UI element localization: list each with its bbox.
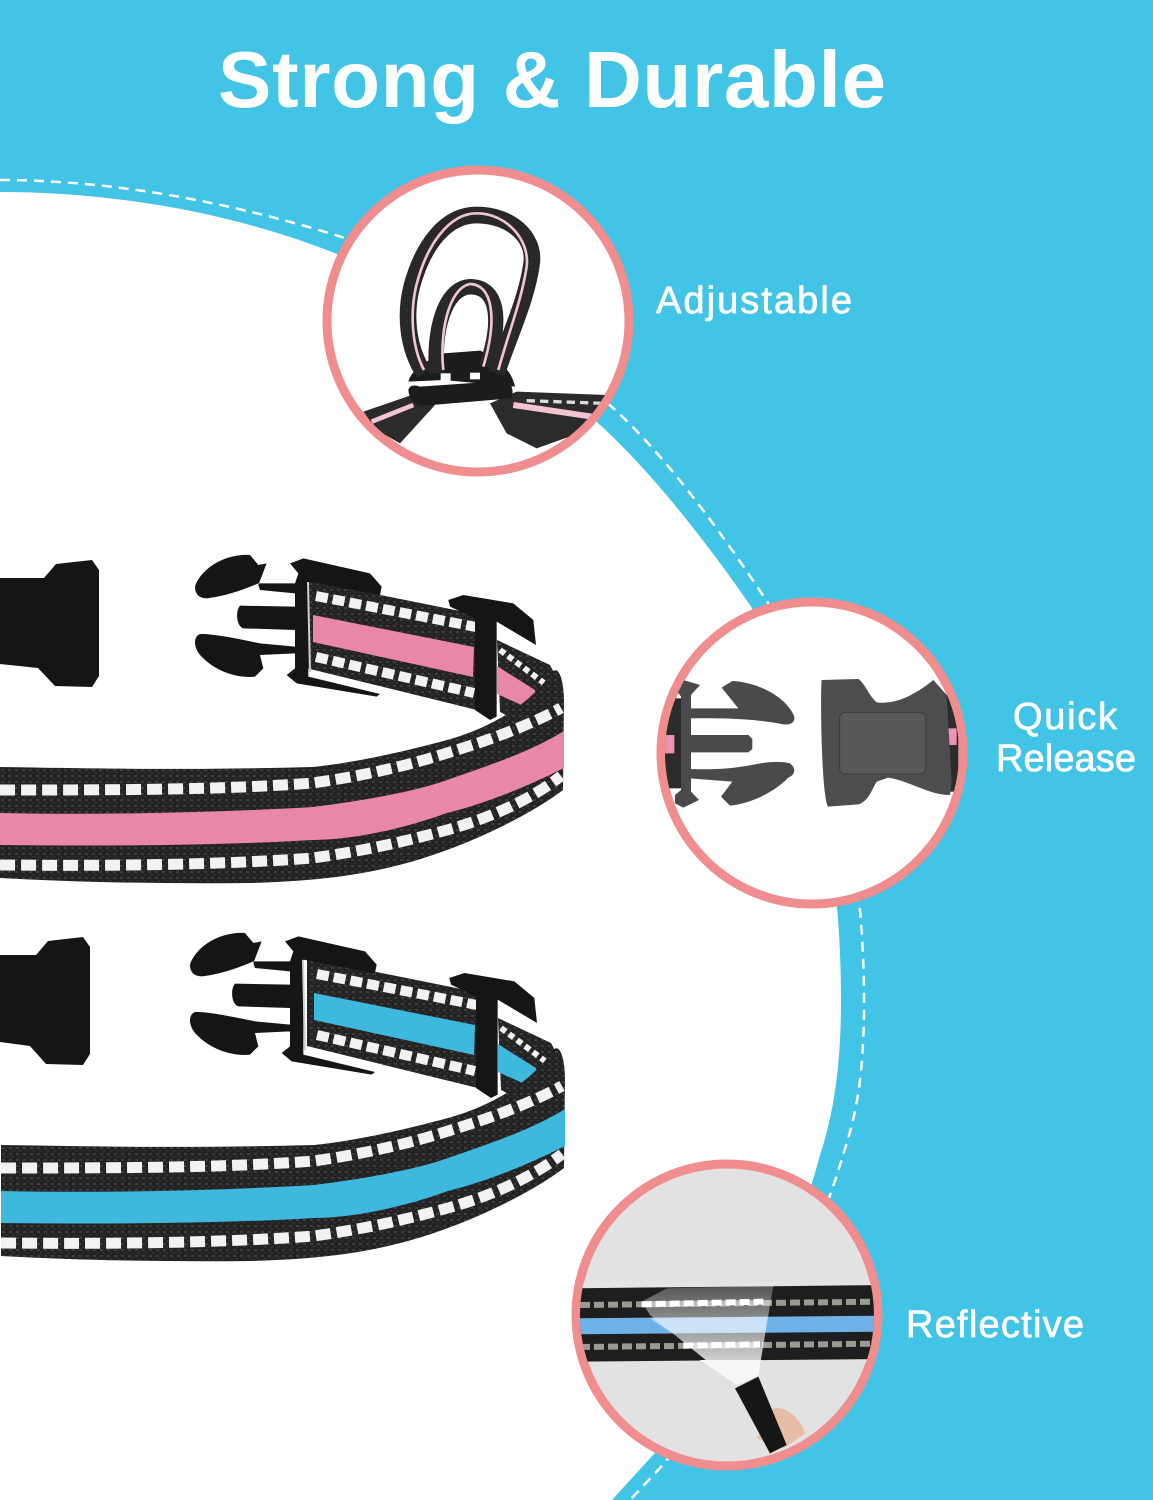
adjustable strap photo <box>363 213 607 448</box>
label line: quick: Quick <box>1013 696 1118 738</box>
quick release circle ring <box>661 602 963 904</box>
label line: release: Release <box>996 738 1136 780</box>
adjustable circle ring <box>327 170 629 472</box>
panel: quick release detail <box>661 602 963 904</box>
panel: adjustable detail <box>327 170 629 472</box>
label: quick release <box>996 696 1136 780</box>
title: Strong & Durable <box>218 35 886 124</box>
pink collar left buckle <box>0 560 99 687</box>
blue collar <box>0 578 886 1261</box>
reflective strap photo <box>570 1282 890 1453</box>
dashed arc line <box>0 180 864 1500</box>
reflective circle ring <box>576 1164 878 1466</box>
white arc shape <box>0 192 841 1500</box>
pink collar <box>0 200 885 883</box>
label: reflective: Reflective <box>906 1304 1084 1346</box>
blue collar left buckle <box>0 937 90 1065</box>
quick release buckle photo <box>664 679 958 808</box>
panel: reflective detail <box>570 1164 890 1466</box>
label: adjustable: Adjustable <box>656 280 852 322</box>
